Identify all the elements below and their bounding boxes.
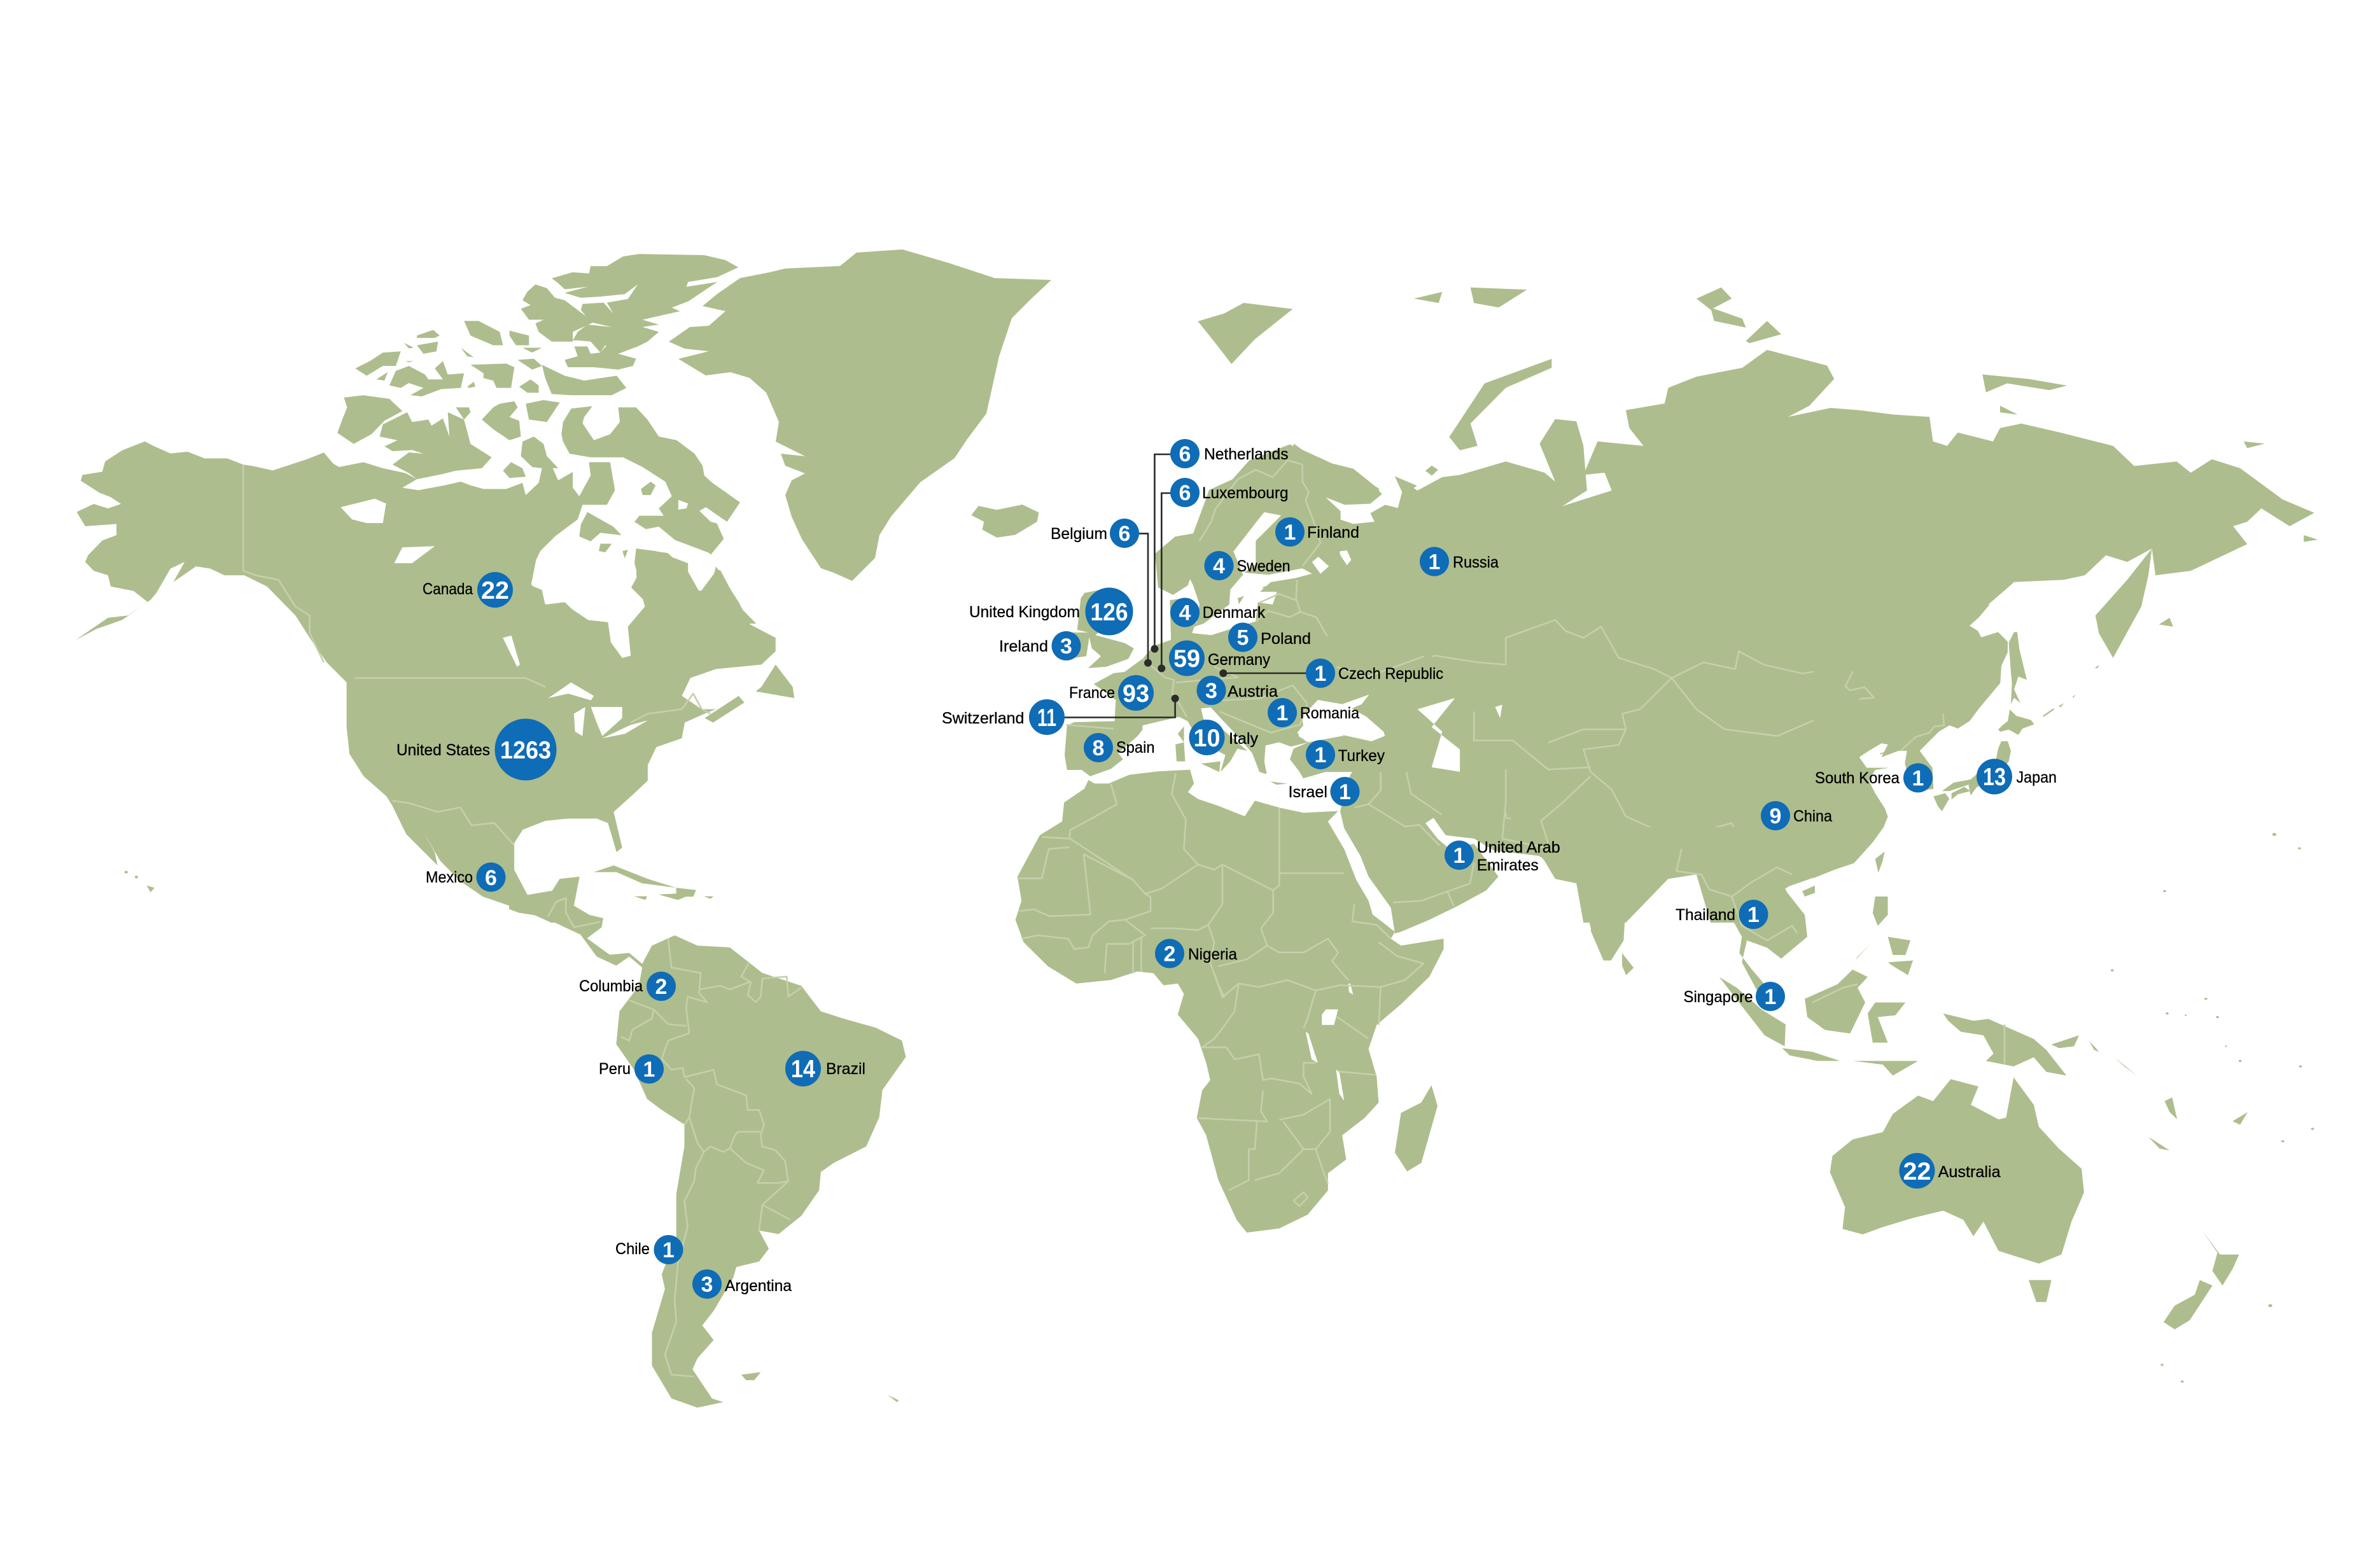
marker: Thailand: 1 [1747,903,1760,927]
marker: Peru [599,1054,664,1084]
marker: Singapore: Singapore [1684,988,1753,1006]
marker: South Korea: 1 [1912,766,1924,790]
marker: Romania: Romania [1300,704,1359,722]
marker: Germany [1169,640,1270,676]
marker: Nigeria: 2 [1164,942,1175,966]
marker: United Kingdom: United Kingdom [969,603,1080,621]
marker: Italy: 10 [1194,725,1221,752]
marker: Mexico: Mexico [426,869,473,886]
marker: Netherlands [1170,439,1288,468]
marker: Japan: 13 [1983,764,2006,791]
marker: Poland [1228,622,1311,652]
marker: Australia: 22 [1903,1158,1931,1185]
marker: Poland: Poland [1261,630,1311,648]
marker: Singapore [1684,982,1785,1011]
marker: United Kingdom [969,588,1133,635]
marker: United Arab Emirates: Emirates [1477,856,1539,874]
marker: Denmark: Denmark [1203,604,1265,622]
marker: France: France [1069,684,1115,702]
marker: Austria [1196,676,1278,705]
marker: Russia [1420,547,1499,576]
marker: Sweden: 4 [1213,554,1225,578]
marker: Austria: 3 [1205,679,1217,703]
marker: Brazil: 14 [791,1056,815,1083]
marker: China: China [1793,807,1832,825]
landmass: northern Canada and Arctic islands [331,254,756,624]
marker: South Korea [1815,764,1933,793]
marker: United Kingdom: 126 [1091,599,1128,626]
connector: Netherlands [1151,454,1185,653]
marker: Denmark [1170,598,1265,627]
marker: Switzerland [942,699,1065,735]
marker: Nigeria [1155,939,1237,968]
marker: Mexico [426,863,505,892]
marker: Belgium: 6 [1119,522,1130,546]
world map [76,249,2318,1407]
marker: United Arab Emirates: 1 [1453,844,1465,868]
marker: Czech Republic [1306,659,1443,688]
marker: Italy [1189,720,1258,755]
marker: Turkey: Turkey [1338,747,1385,765]
marker: Chile [615,1235,683,1264]
marker: Romania: 1 [1277,701,1288,725]
marker: Canada: 22 [481,577,509,604]
marker: Peru: Peru [599,1060,631,1078]
marker: Thailand: Thailand [1676,906,1735,924]
landmass: North America [76,442,794,923]
marker: Spain [1084,733,1154,762]
marker: Netherlands: Netherlands [1204,445,1288,463]
marker: Columbia: 2 [655,975,667,999]
marker: United States: 1263 [500,737,551,764]
marker: Turkey: 1 [1315,743,1326,767]
marker: Israel: Israel [1288,783,1327,801]
landmass: Greenland [669,249,1051,581]
marker: Israel [1288,777,1359,806]
marker: Ireland: Ireland [999,638,1048,655]
landmass: Africa and Middle East [1016,732,1591,1232]
landmass: British Isles, Iceland and European borders [971,505,1424,733]
marker: Switzerland: Switzerland [942,709,1025,727]
marker: Finland [1275,517,1359,547]
marker: South Korea: South Korea [1815,769,1900,787]
marker: Australia [1899,1153,2001,1189]
marker: Czech Republic: Czech Republic [1338,665,1443,683]
marker: Israel: 1 [1339,780,1351,804]
connector: Belgium [1124,534,1152,667]
landmass: Svalbard [1198,303,1292,364]
landmass: Russia and Asia [1273,288,2318,923]
landmass: Scandinavia and northern Europe [1155,444,1438,649]
marker: Nigeria: Nigeria [1188,946,1237,963]
marker: Ireland: 3 [1060,634,1072,659]
marker: Japan [1977,758,2057,794]
marker: Brazil [785,1051,865,1087]
marker: Belgium: Belgium [1051,525,1107,543]
marker: Denmark: 4 [1179,601,1191,625]
marker: United Arab Emirates [1445,839,1560,874]
marker: China: 9 [1770,804,1781,828]
marker: Germany: 59 [1173,645,1200,673]
marker: Chile: 1 [662,1238,675,1262]
connector: Luxembourg [1158,493,1185,672]
marker: Luxembourg: 6 [1179,481,1191,505]
marker: Finland: 1 [1284,520,1296,545]
marker: Canada: Canada [423,580,473,598]
marker: Brazil: Brazil [826,1060,865,1078]
marker: Australia: Australia [1938,1163,2001,1181]
marker: Spain: Spain [1116,739,1154,757]
marker: France: 93 [1123,680,1149,708]
marker: Thailand [1676,900,1768,929]
marker: Sweden: Sweden [1237,557,1291,575]
marker: United States [396,719,556,780]
marker: Canada [423,572,513,608]
marker: Luxembourg: Luxembourg [1202,484,1288,502]
landmass: South and Central America [509,891,906,1407]
marker: Luxembourg [1170,478,1288,507]
marker: Mexico: 6 [485,866,497,890]
marker: Argentina [692,1269,792,1299]
connector: Switzerland [1047,695,1179,718]
marker: France [1069,675,1154,711]
marker: Ireland [999,631,1081,660]
marker: Romania [1268,698,1359,727]
marker: United Arab Emirates: United Arab [1477,839,1560,856]
marker: Chile: Chile [615,1240,650,1258]
marker: Spain: 8 [1093,736,1104,760]
marker: China [1761,801,1832,830]
connector: Czech Republic [1219,669,1320,677]
marker: Singapore: 1 [1765,985,1776,1009]
landmass: East Asia coast, Korea and Japan [1814,604,2099,878]
landmass: western and southern Europe, Turkey [1065,636,1432,785]
marker: Finland: Finland [1307,524,1359,541]
marker: Germany: Germany [1208,651,1270,669]
marker: Argentina: Argentina [725,1277,792,1295]
marker: Peru: 1 [643,1058,655,1082]
marker: Austria: Austria [1228,683,1278,701]
marker: United States: United States [396,741,490,759]
marker: Italy: Italy [1229,730,1258,748]
marker: Japan: Japan [2016,769,2057,786]
marker: Russia: 1 [1429,550,1440,574]
marker: Switzerland: 11 [1037,704,1056,732]
marker: Columbia: Columbia [579,977,643,995]
marker: Turkey [1306,740,1385,769]
marker: Russia: Russia [1453,554,1499,571]
marker: Sweden [1204,551,1291,580]
marker: Netherlands: 6 [1179,442,1191,466]
marker: Belgium [1051,519,1139,548]
marker: Czech Republic: 1 [1315,662,1326,686]
marker: Columbia [579,972,676,1001]
landmass: South-East Asia and Oceania [1591,827,2314,1383]
marker: Poland: 5 [1237,626,1249,650]
marker: Argentina: 3 [701,1273,713,1297]
